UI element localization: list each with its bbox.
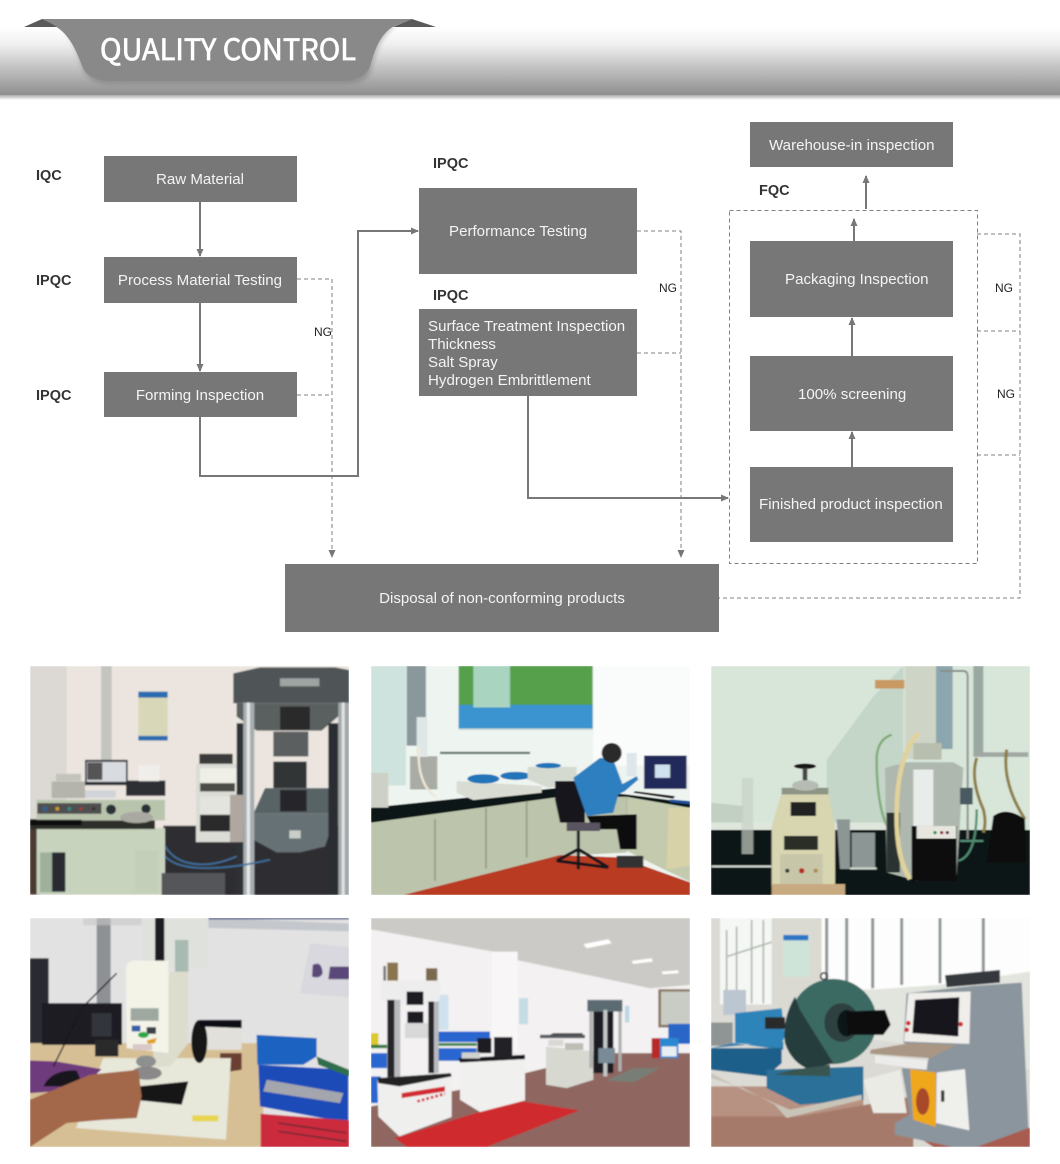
box labels: Process Material Testing (118, 272, 282, 289)
photo: technician at microscope in lab (371, 666, 690, 895)
photo: universal testing machine with control desk (30, 666, 349, 895)
stage labels: FQC (759, 183, 790, 199)
stage labels (36, 156, 790, 404)
box labels: Disposal of non-conforming products (379, 590, 625, 607)
NG labels: NG (659, 281, 677, 295)
stage labels: IPQC (36, 273, 72, 289)
title: QUALITY CONTROL (100, 27, 356, 69)
NG labels: NG (995, 281, 1013, 295)
solid arrows (200, 176, 866, 498)
stage labels: IPQC (433, 156, 469, 172)
ribbon shadow (60, 27, 395, 84)
stage labels: IPQC (433, 288, 469, 304)
box labels: Raw Material (156, 171, 244, 188)
box labels: Salt Spray (428, 354, 498, 371)
photo: lab bench with distiller (711, 666, 1030, 895)
box labels: Packaging Inspection (785, 271, 928, 288)
box labels: Thickness (428, 336, 496, 353)
stage labels: IQC (36, 168, 62, 184)
header banner (0, 19, 1060, 100)
box labels: Warehouse-in inspection (769, 137, 935, 154)
ribbon tabs (24, 19, 436, 27)
photo: dynamometer bench with control console (711, 918, 1030, 1147)
flow boxes (104, 122, 953, 632)
NG labels: NG (997, 387, 1015, 401)
photo: testing hall with red mat (371, 918, 690, 1147)
box labels: Forming Inspection (136, 387, 264, 404)
flow chart (36, 122, 1020, 632)
stage labels: IPQC (36, 388, 72, 404)
box labels (118, 137, 943, 607)
dashed NG lines (297, 210, 1020, 598)
box labels: Performance Testing (449, 223, 587, 240)
photo: digital hardness gauge on desk (30, 918, 349, 1147)
box labels: Finished product inspection (759, 496, 943, 513)
box labels: Hydrogen Embrittlement (428, 372, 592, 389)
NG labels: NG (314, 325, 332, 339)
box labels: 100% screening (798, 386, 906, 403)
ribbon (42, 19, 412, 81)
NG labels (314, 281, 1015, 401)
box labels: Surface Treatment Inspection (428, 318, 625, 335)
